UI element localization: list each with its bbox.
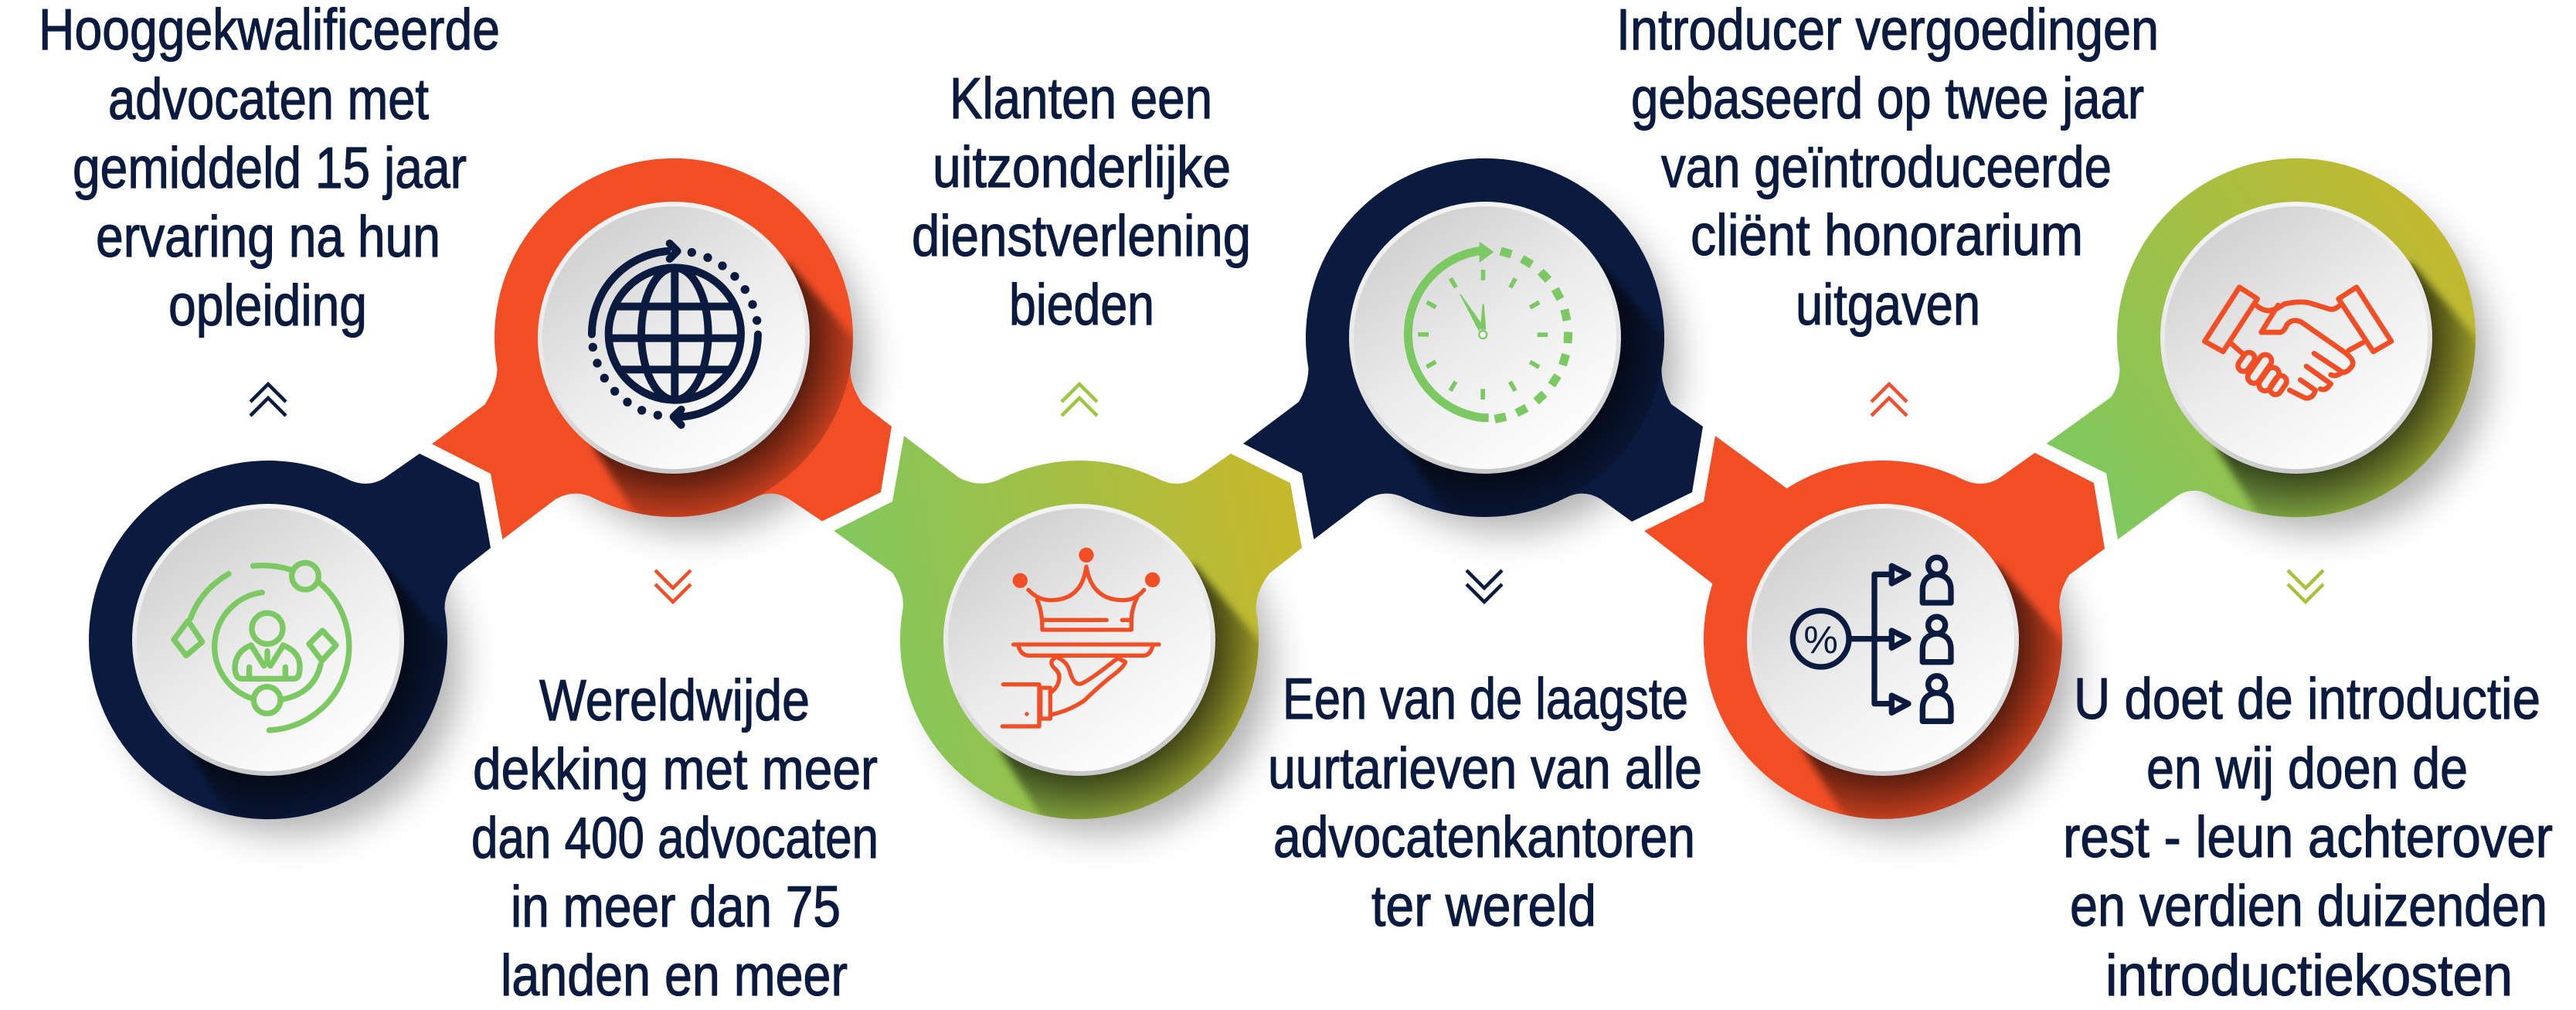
icon: person network xyxy=(174,563,349,730)
text: step 3: Klanten een xyxy=(950,66,1212,131)
icon: percentage distributed to people: % xyxy=(1803,618,1838,661)
step 5 node: orange xyxy=(1644,436,2105,819)
text: step 3: dienstverlening xyxy=(912,203,1251,268)
text: step 1: ervaring na hun xyxy=(96,204,440,269)
arrow: step 2 chevrons down xyxy=(655,570,691,602)
icon: crown on a serving tray xyxy=(1002,548,1160,726)
text: step 5: uitgaven xyxy=(1796,272,1980,337)
text: step 5 xyxy=(1616,0,2159,337)
arrow: step 3 chevrons up xyxy=(1062,384,1097,416)
step 2 node: orange xyxy=(432,158,892,539)
arrow: step 4 chevrons down xyxy=(1466,570,1502,602)
text: step 2: in meer dan 75 xyxy=(511,874,841,939)
text: step 5: van geïntroduceerde xyxy=(1661,134,2112,199)
icon: handshake xyxy=(2204,287,2391,398)
text: step 4 xyxy=(1268,666,1702,938)
text: step 4: Een van de laagste xyxy=(1283,666,1688,731)
step 4 node: navy xyxy=(1243,158,1703,539)
step 1 node: navy xyxy=(89,454,491,819)
soft drop shadows xyxy=(118,189,2489,835)
arrow: step 1 chevrons up xyxy=(250,384,286,416)
text: step 4: uurtarieven van alle xyxy=(1268,736,1702,801)
text: step 2: landen en meer xyxy=(501,943,848,1008)
arrow: step 6 chevrons down xyxy=(2288,570,2323,602)
text: step 3: bieden xyxy=(1009,272,1154,337)
text: step 5: cliënt honorarium xyxy=(1691,202,2083,267)
text: step 1: opleiding xyxy=(168,273,367,338)
text: step 4: advocatenkantoren xyxy=(1273,804,1695,869)
text: step 2: dekking met meer xyxy=(473,736,878,801)
step 3 node: green xyxy=(834,436,1302,819)
text: step 6 xyxy=(2063,666,2553,1008)
text: step 3: uitzonderlijke xyxy=(933,134,1231,199)
text: step 1: advocaten met xyxy=(108,66,429,131)
text: step 6: introductiekosten xyxy=(2105,943,2513,1008)
text: step 2: dan 400 advocaten xyxy=(471,805,878,870)
icon: globe with arrows xyxy=(589,243,761,425)
text: step 1: gemiddeld 15 jaar xyxy=(73,135,467,200)
text: step 4: ter wereld xyxy=(1371,873,1596,938)
text: step 6: en wij doen de xyxy=(2146,736,2468,801)
icon: percentage distributed to people xyxy=(1793,557,1951,721)
arrow: step 5 chevrons up xyxy=(1871,384,1907,416)
text: step 5: gebaseerd op twee jaar xyxy=(1631,66,2144,131)
text: step 3 xyxy=(912,66,1251,337)
text: step 1 xyxy=(39,0,500,338)
step 6 node: green xyxy=(2046,158,2476,539)
text: step 2 xyxy=(471,668,878,1008)
icon: clock xyxy=(1408,242,1572,423)
text: step 2: Wereldwijde xyxy=(539,668,810,733)
